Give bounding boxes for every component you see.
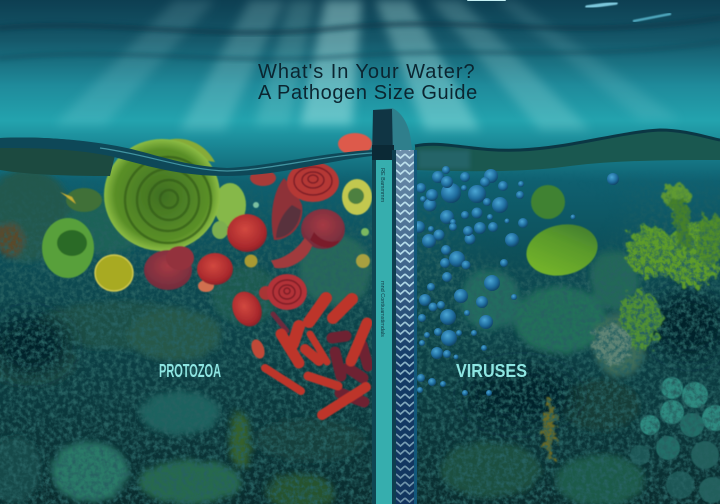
water surface band, right [415, 130, 720, 171]
light rays [55, 0, 680, 130]
protozoa: large green cyst [104, 139, 220, 251]
title: A Pathogen Size Guide [258, 82, 478, 104]
filter vertical small text, lower: mnd Contiuamstimdals [379, 281, 385, 337]
protozoa: yellow disc [95, 255, 133, 291]
filter mesh [396, 150, 414, 504]
protozoa: red cells [144, 170, 345, 360]
organism: large green blob [522, 218, 602, 282]
virus particles [413, 166, 619, 396]
bacteria rods [265, 298, 368, 415]
teal coral balls [630, 377, 720, 503]
protozoa: small cysts [244, 202, 370, 268]
title: What's In Your Water? [258, 61, 476, 83]
right reef foliage [440, 250, 646, 504]
filter membrane [372, 108, 417, 504]
surface ripples at the top [0, 0, 720, 59]
dark reef shadow [0, 291, 720, 425]
label: viruses: VIRUSES [456, 361, 527, 381]
title [258, 61, 478, 104]
filter vertical small text: RE Bammmm [379, 168, 385, 203]
protozoa: green behind [147, 139, 246, 239]
filter text panel [376, 160, 392, 504]
protozoa: left green ring [42, 218, 94, 278]
protozoa: coral cyst on surface [338, 133, 372, 155]
left reef foliage [0, 169, 371, 504]
foliage shadow texture [0, 170, 720, 504]
protozoa: yellow-green right [342, 179, 372, 215]
water surface band, left [0, 137, 372, 176]
filter side frame [372, 160, 376, 504]
filter cap [372, 108, 414, 160]
right green organisms [522, 185, 602, 282]
protozoa: small green, top left [60, 188, 102, 212]
protozoa: ringed red discs [259, 162, 339, 310]
bright seaweed [544, 184, 720, 462]
protozoa group [42, 133, 372, 360]
label: protozoa: PROTOZOA [159, 361, 221, 381]
organism: small green blob [531, 185, 565, 219]
